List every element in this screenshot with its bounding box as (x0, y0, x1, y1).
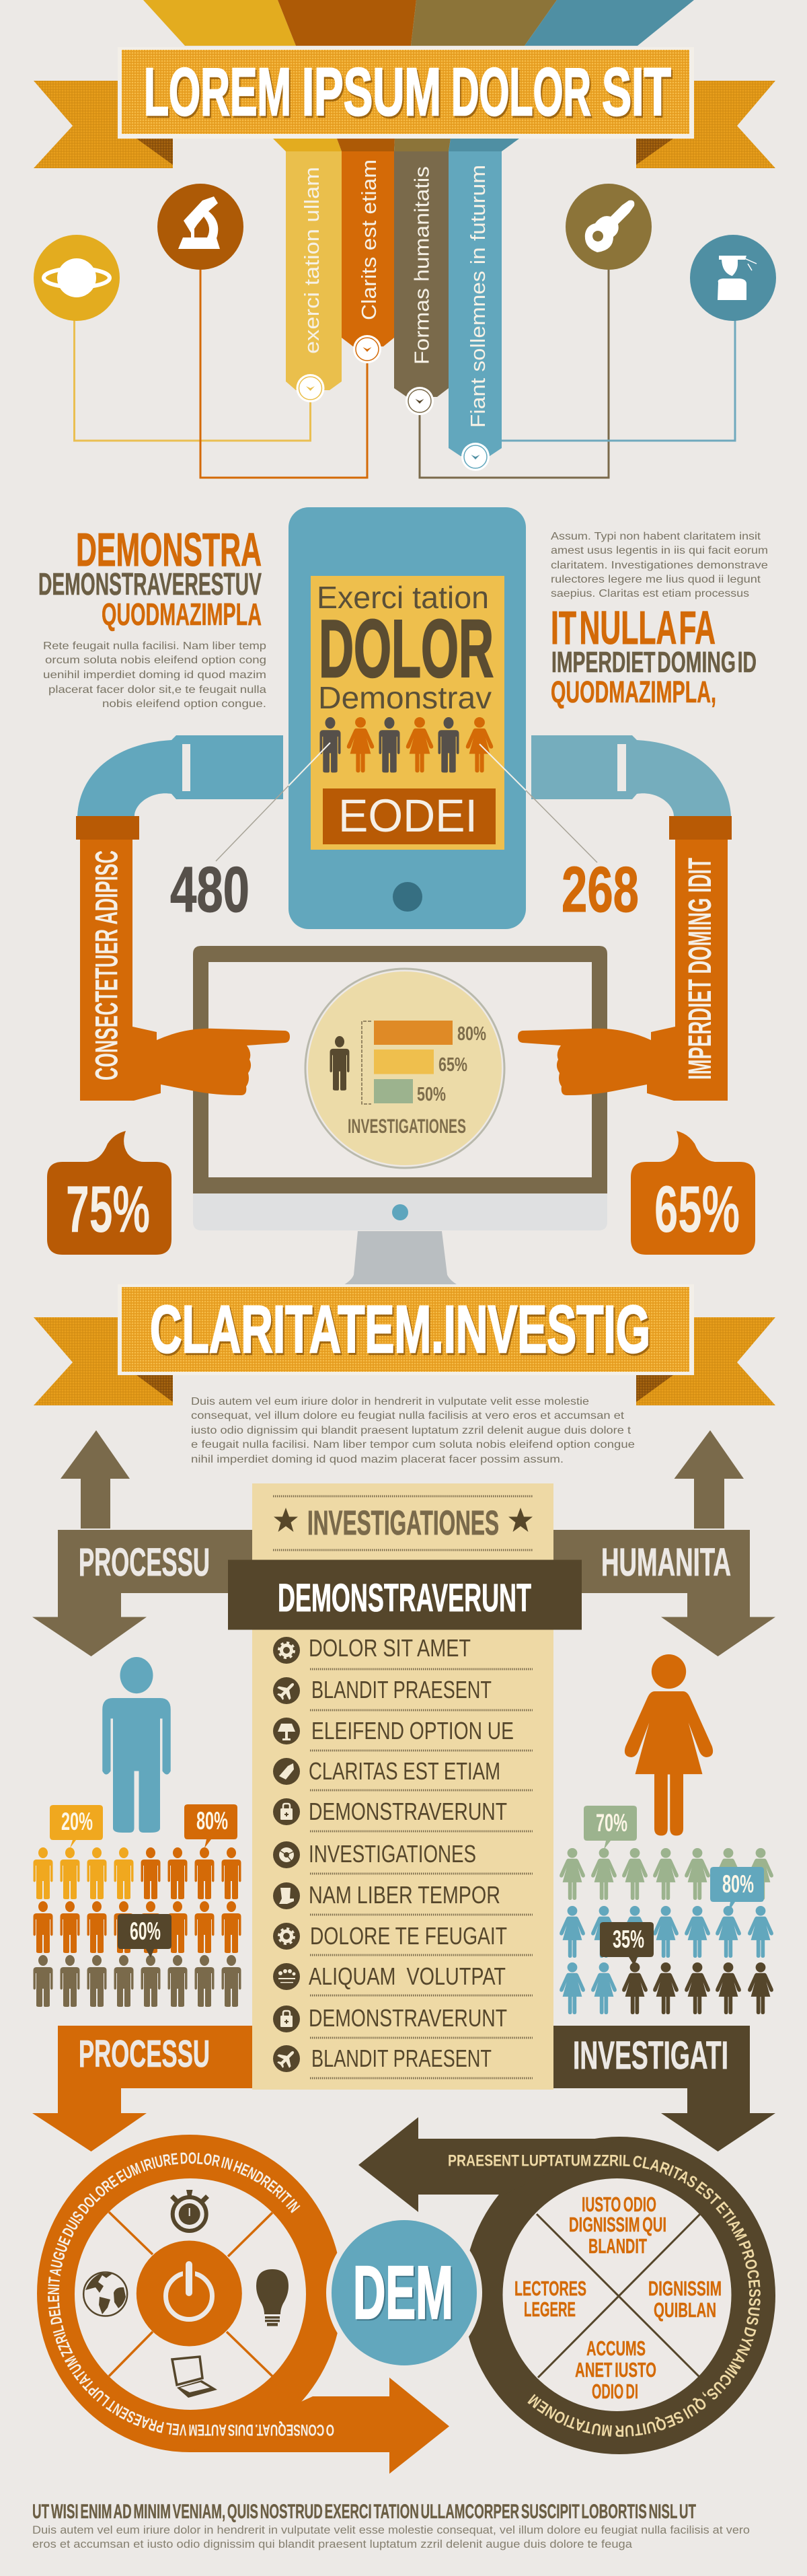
right paragraph: Assum. Typi non habent claritatem insit (551, 531, 761, 542)
people grid right (560, 1848, 773, 2014)
vertical tab: Formas humanitatis (394, 139, 451, 415)
list item (273, 1798, 507, 1825)
list item (273, 1922, 507, 1950)
title text: IPSUM (302, 54, 441, 130)
list item (273, 1757, 500, 1785)
list item (273, 1881, 500, 1909)
right paragraph: saepius. Claritas est etiam processus (551, 588, 749, 599)
icon: microscope (157, 184, 243, 270)
left paragraph: nobis eleifend option congue. (102, 698, 266, 710)
bubble 35%: 35% (613, 1925, 644, 1953)
footer paragraph: Duis autem vel eum iriure dolor in hendrerit in vulputate velit esse molestie consequat, vel illum dolore eu feugiat nulla facilisis at vero (32, 2524, 750, 2536)
intro paragraph: Duis autem vel eum iriure dolor in hendrerit in vulputate velit esse molestie (191, 1396, 589, 1407)
callout lines (216, 743, 597, 862)
arrows: humanita olive (553, 1430, 775, 1656)
list item: INVESTIGATIONES (309, 1840, 476, 1868)
list item: DEMONSTRAVERUNT (309, 1798, 507, 1825)
screen people (319, 717, 493, 772)
pipe left (76, 735, 283, 840)
list item (273, 2045, 492, 2072)
list item: CLARITAS EST ETIAM (309, 1757, 500, 1785)
list item: NAM LIBER TEMPOR (309, 1881, 500, 1909)
arrows: processu olive: PROCESSU (79, 1541, 210, 1584)
arrows: humanita olive: HUMANITA (601, 1541, 731, 1584)
vertical tab: exerci tation ullam: exerci tation ullam (300, 167, 323, 354)
bubble 65%: 65% (654, 1172, 740, 1246)
bubble 75%: 75% (66, 1172, 150, 1246)
phone button (393, 882, 422, 912)
number 480: 480 (170, 854, 249, 926)
title text: SIT (602, 54, 671, 130)
left paragraph (43, 640, 266, 710)
list item (273, 1840, 476, 1868)
right paragraph: claritatem. Investigationes demonstrave (551, 560, 768, 571)
people grid left (34, 1847, 241, 2007)
bar labels: 50% (417, 1084, 446, 1105)
ribbon tail right (636, 81, 775, 168)
footer paragraph: eros et accumsan et iusto odio dignissim qui blandit praesent luptatum zzril delenit augue duis dolore te feuga (32, 2538, 633, 2550)
ribbon tail left (34, 1317, 173, 1405)
dark banner on top of arrows (553, 2026, 775, 2151)
bubble 65% (631, 1131, 755, 1255)
icon: planet (34, 235, 120, 321)
list item (273, 1717, 514, 1744)
chart caption: INVESTIGATIONES (348, 1115, 466, 1138)
spokes (537, 2214, 700, 2378)
bubble 80% right: 80% (722, 1870, 754, 1898)
bar labels (417, 1023, 486, 1105)
collar right (669, 816, 732, 840)
pipe right (531, 735, 732, 840)
right paragraph: amest usus legentis in iis qui facit eorum (551, 545, 768, 556)
bubble 60%: 60% (130, 1917, 161, 1945)
list item: DEMONSTRAVERUNT (309, 2004, 507, 2032)
wheel labels: IUSTO ODIO (582, 2193, 656, 2216)
icon: laptop (172, 2357, 217, 2398)
left headline block (38, 523, 262, 632)
panel heading: INVESTIGATIONES (307, 1504, 499, 1542)
wheel labels: LECTORES (514, 2277, 586, 2300)
phone (289, 507, 526, 929)
list item: ALIQUAM VOLUTPAT (309, 1962, 506, 1990)
DEM circle: DEM (353, 2251, 453, 2334)
curved text left: O CONSEQUAT. DUIS AUTEM VEL PRAESENT LUPTATUM ZZRIL DELENIT AUGUE DUIS DOLORE EUM IRIURE DOLOR IN HENDRERIT IN (48, 2152, 334, 2436)
bubble 75% (47, 1131, 171, 1255)
list item: ELEIFEND OPTION UE (311, 1717, 514, 1744)
right ring with arrow (358, 2117, 775, 2454)
title text: DOLOR (451, 54, 591, 130)
icon: guitar (566, 184, 652, 270)
title plate (118, 47, 694, 139)
list item: BLANDIT PRAESENT (311, 2045, 492, 2072)
screen text: Demonstrav (318, 680, 492, 715)
wheel labels: DIGNISSIM (648, 2277, 722, 2300)
vertical tab: Fiant sollemnes in futurum: Fiant sollemnes in futurum (466, 165, 490, 428)
bubble 35% (600, 1922, 654, 1966)
vertical tab: Clarits est etiam (337, 139, 395, 363)
bubble 70%: 70% (596, 1809, 627, 1837)
bubble 20% (50, 1805, 103, 1848)
wheel labels (514, 2193, 722, 2403)
left headline block: DEMONSTRA (76, 523, 262, 576)
ribbon tail right (636, 1317, 775, 1405)
intro paragraph: nihil imperdiet doming id quod mazim placerat facer possim assum. (191, 1454, 564, 1465)
bar labels: 80% (457, 1023, 486, 1045)
title text (144, 54, 671, 130)
intro paragraph: e feugait nulla facilisi. Nam liber tempor cum soluta nobis eleifend option congue (191, 1439, 635, 1450)
number 268: 268 (562, 854, 639, 926)
list item (273, 2004, 507, 2032)
arrow: processu orange: PROCESSU (79, 2032, 210, 2075)
right paragraph (551, 531, 768, 599)
arrow: processu orange (32, 2026, 252, 2151)
screen text: DOLOR (319, 603, 494, 694)
panel heading (273, 1496, 533, 1550)
screen text: Exerci tation (317, 580, 489, 615)
list dividers (310, 1669, 533, 2078)
title text: LOREM (144, 54, 291, 130)
bubble 80% right (710, 1867, 764, 1912)
bar labels: 65% (438, 1054, 467, 1076)
monitor stand (340, 1231, 461, 1287)
left headline block: DEMONSTRAVERESTUV (38, 566, 262, 601)
left paragraph: placerat facer dolor sit,e te feugait nulla (48, 684, 266, 696)
wheel labels: BLANDIT (588, 2234, 647, 2258)
wheel labels: ANET IUSTO (575, 2358, 656, 2382)
person (330, 1036, 350, 1091)
monitor (193, 946, 607, 1287)
dark banner (228, 1559, 582, 1629)
ribbon tail left (34, 81, 173, 168)
right headline block (551, 601, 757, 709)
bubble 20%: 20% (61, 1808, 93, 1835)
bracket (362, 1021, 371, 1104)
vertical tab: Formas humanitatis: Formas humanitatis (410, 166, 433, 365)
vertical tab: Clarits est etiam: Clarits est etiam (357, 159, 381, 320)
connector lines from icons (74, 270, 735, 478)
big woman figure (625, 1654, 713, 1835)
left paragraph: Rete feugait nulla facilisi. Nam liber temp (43, 640, 266, 652)
left paragraph: uenihil imperdiet doming id quod mazim (43, 669, 266, 681)
bubble 70% (584, 1806, 637, 1849)
bars (374, 1021, 453, 1103)
right band and pointing hand (518, 840, 728, 1101)
bubble 80%: 80% (196, 1807, 228, 1835)
left headline block: QUODMAZIMPLA (102, 597, 262, 632)
intro paragraph (191, 1396, 635, 1465)
left paragraph: orcum soluta nobis eleifend option cong (45, 655, 266, 666)
left band and pointing hand (80, 840, 290, 1101)
wheel labels: ACCUMS (586, 2336, 646, 2360)
wheel labels: QUIBLAN (654, 2298, 716, 2322)
wheel labels: ODIO DI (592, 2380, 638, 2403)
icon: light bulb (256, 2269, 289, 2326)
power button (137, 2240, 242, 2347)
dark banner: DEMONSTRAVERUNT (278, 1576, 531, 1620)
right band and pointing hand: IMPERDIET DOMING IDIT (683, 858, 718, 1080)
list item: DOLORE TE FEUGAIT (310, 1922, 507, 1950)
screen text (317, 580, 494, 715)
vertical tab: exerci tation ullam (273, 139, 342, 402)
spokes (109, 2212, 272, 2376)
list item (273, 1634, 471, 1664)
DEM circle (326, 2215, 482, 2371)
intro paragraph: iusto odio dignissim qui blandit praesent luptatum zzril delenit augue duis dolore t (191, 1425, 631, 1436)
right paragraph: rulectores legere me lius quod ii legunt (551, 574, 761, 585)
wheel labels: DIGNISSIM QUI (569, 2213, 666, 2236)
intro paragraph: consequat, vel illum dolore eu feugiat nulla facilisis at vero eros et accumsan et (191, 1410, 625, 1422)
list item: DOLOR SIT AMET (309, 1634, 471, 1662)
left band and pointing hand: CONSECTETUER ADIPISC (89, 850, 124, 1080)
icon: stopwatch (170, 2190, 209, 2231)
top colour beams (143, 0, 694, 46)
chart circle (305, 969, 504, 1168)
list item (273, 1962, 506, 1990)
phone screen (311, 576, 504, 850)
footer paragraph (32, 2524, 750, 2550)
icon: graduate (690, 235, 776, 321)
title ribbon (34, 47, 775, 168)
second ribbon (34, 1284, 775, 1405)
left ring with arrow (37, 2135, 449, 2474)
collar left (76, 816, 139, 840)
center panel (228, 1483, 582, 2090)
EODEI label: EODEI (338, 790, 477, 842)
plate (118, 1284, 694, 1375)
big man figure (102, 1657, 171, 1833)
list item (273, 1676, 492, 1704)
bubble 60% (118, 1914, 171, 1958)
list item: BLANDIT PRAESENT (311, 1676, 492, 1703)
bubble 80% (184, 1804, 237, 1848)
wheel labels: LEGERE (524, 2297, 576, 2321)
vertical tab: Fiant sollemnes in futurum (449, 139, 519, 471)
icon: globe (83, 2273, 127, 2316)
arrows: processu olive (32, 1430, 252, 1656)
curved text right: PRAESENT LUPTATUM ZZRIL CLARITAS EST ETIAM PROCESSUS DYNAMICUS, QUI SEQUITUR MUTATIONEM (449, 2154, 761, 2437)
right headline block: QUODMAZIMPLA, (551, 675, 716, 709)
